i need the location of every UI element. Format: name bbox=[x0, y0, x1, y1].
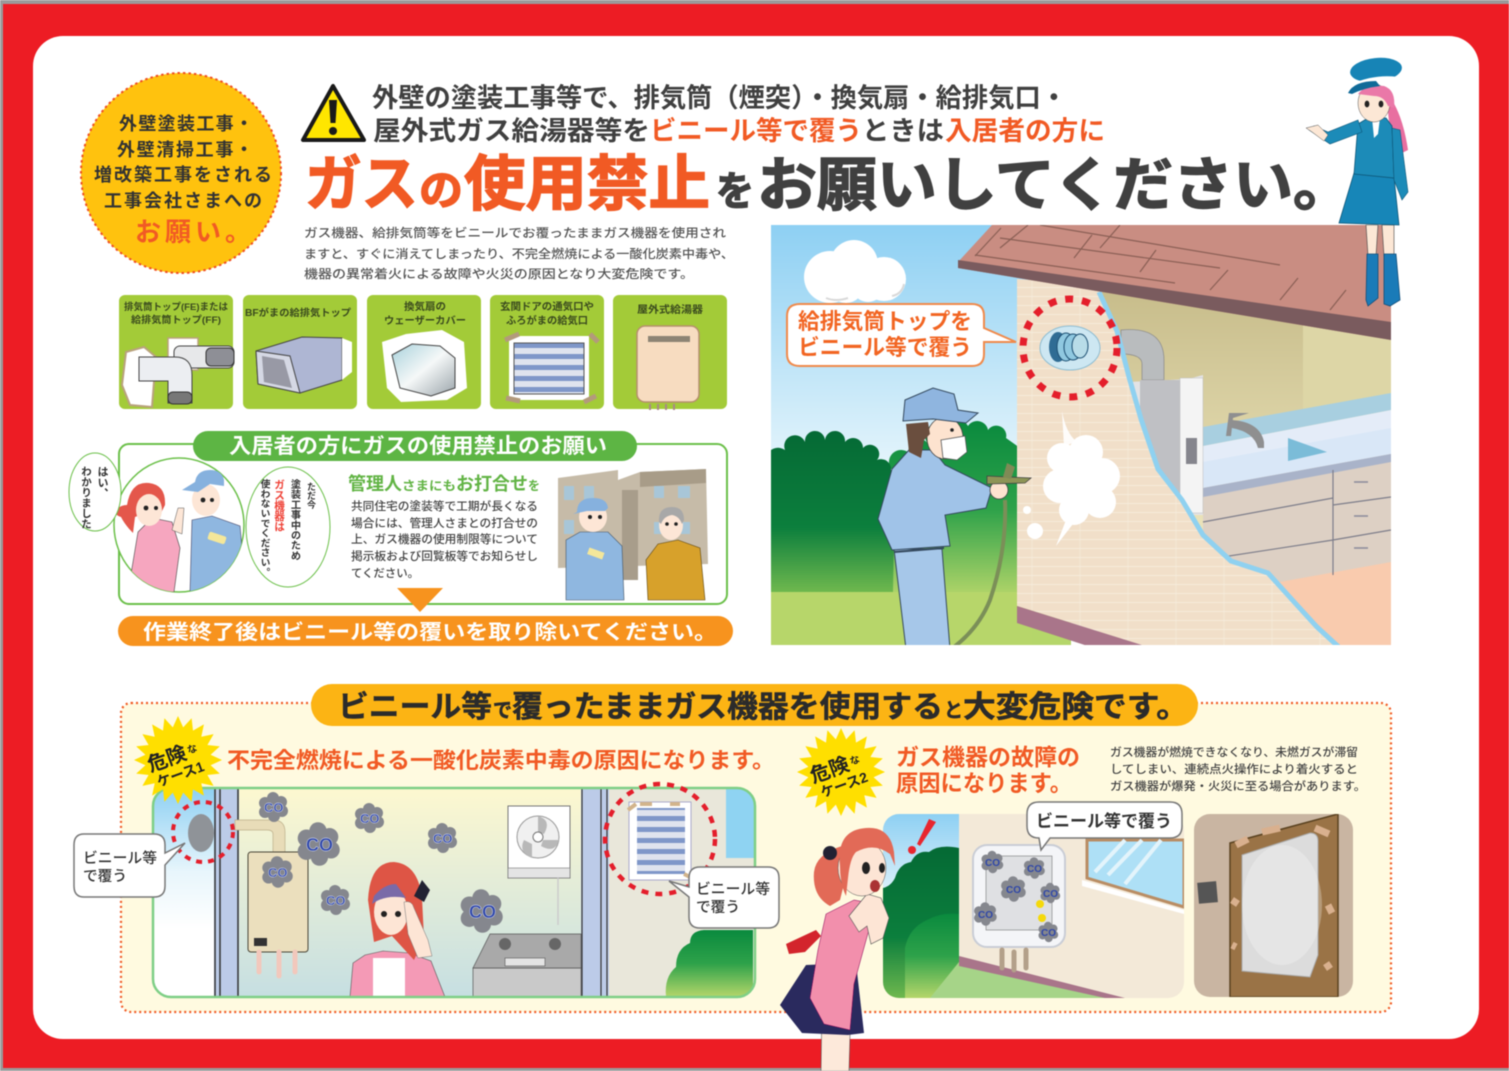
CO clouds: CO bbox=[306, 835, 333, 855]
spray foam bbox=[1023, 411, 1120, 546]
water heater and duct bbox=[235, 820, 308, 976]
wall with foundation and blue cutaway edge bbox=[1017, 279, 1342, 650]
arrow: down to final step bbox=[397, 588, 443, 612]
text block: case 2 explanation: ガス機器が燃焼できなくなり、未燃ガスが滞留 bbox=[1110, 745, 1358, 759]
heading: title lines: 外壁の塗装工事等で、排気筒（煙突）・換気扇・給排気口・ bbox=[372, 83, 1067, 113]
callout: left vent covered: ビニール等 bbox=[83, 849, 157, 867]
text block: consult the building manager: 上、ガス機器の使用制限等について bbox=[351, 532, 538, 546]
text block: intro explanation: ますと、すぐに消えてしまったり、不完全燃焼による一酸化炭素中毒や、 bbox=[304, 246, 734, 261]
callout: covered heater: ビニール等で覆う bbox=[1036, 811, 1172, 831]
card: weather cover bbox=[367, 295, 481, 409]
heading: title lines: ガス bbox=[305, 151, 418, 218]
heading: case 1: 不完全燃焼による一酸化炭素中毒の原因になります。 bbox=[227, 748, 775, 773]
window bbox=[1082, 840, 1184, 914]
covered water heater with CO: CO bbox=[978, 910, 993, 921]
text block: consult the building manager: を bbox=[528, 479, 540, 493]
gas stove bbox=[473, 934, 581, 1000]
text block: consult the building manager: さまにも bbox=[402, 479, 456, 493]
heading: case 2 bbox=[896, 744, 1080, 796]
heading pill: 大変危険です。 bbox=[963, 691, 1189, 724]
banner: remove the covering afterwards bbox=[118, 616, 733, 646]
badge: danger case 2: 危険 bbox=[807, 752, 852, 788]
wall fan bbox=[508, 806, 570, 925]
badge: request to contractors: 工事会社さまへの bbox=[104, 191, 262, 211]
panel: danger section bbox=[74, 684, 1391, 1071]
heading: case 2: ガス機器の故障の bbox=[896, 744, 1080, 770]
badge: danger case 2 bbox=[797, 728, 885, 816]
badge: danger case 1 bbox=[134, 716, 222, 804]
CO clouds: CO bbox=[326, 893, 346, 908]
covered water heater with CO: CO bbox=[1041, 928, 1056, 939]
bubble: resident reply: はい、 bbox=[96, 466, 108, 499]
icon: red exclamation mark bbox=[908, 819, 936, 854]
callout: right vent covered: ビニール等 bbox=[696, 880, 770, 898]
CO clouds: CO bbox=[264, 800, 284, 815]
illustration: resident and worker talking bbox=[114, 458, 246, 592]
CO clouds: CO bbox=[469, 902, 496, 922]
CO clouds: CO bbox=[268, 865, 288, 880]
text block: case 2 explanation: ガス機器が爆発・火災に至る場合があります。 bbox=[1110, 779, 1366, 793]
roof bbox=[958, 225, 1391, 340]
heading pill: ビニール等 bbox=[338, 691, 492, 724]
icon: warning triangle bbox=[303, 86, 364, 140]
scene: carbon monoxide indoors bbox=[153, 784, 755, 1000]
bubble: worker request: ガス機器は bbox=[273, 479, 285, 532]
card: weather cover: ウェーザーカバー bbox=[384, 315, 466, 327]
badge: request to contractors: 増改築工事をされる bbox=[94, 164, 272, 185]
card: door vent: 玄関ドアの通気口や bbox=[500, 300, 594, 313]
heading: title lines: 入居者の方に bbox=[945, 116, 1105, 146]
CO clouds: CO bbox=[360, 811, 380, 826]
right wall vent bbox=[628, 802, 692, 880]
illustration: apartment building, worker and manager bbox=[558, 469, 708, 600]
character: guide woman in blue uniform bbox=[1306, 55, 1408, 306]
card: exhaust top: 給排気筒トップ(FF) bbox=[131, 314, 221, 326]
text block: case 2 explanation bbox=[1110, 745, 1366, 793]
covered water heater with CO: CO bbox=[985, 858, 1000, 869]
card: weather cover: 換気扇の bbox=[404, 300, 446, 313]
panel: ask residents not to use gas bbox=[69, 431, 727, 604]
text block: intro explanation: 機器の異常着火による故障や火災の原因となり大変危険です。 bbox=[304, 266, 694, 281]
heading pill: 覆ったままガス機器を使用する bbox=[512, 691, 943, 724]
heading: title lines: を bbox=[716, 170, 754, 214]
pill heading: 入居者の方にガスの使用禁止のお願い bbox=[229, 435, 607, 458]
heading pill bbox=[311, 684, 1198, 726]
badge: danger case 1: な bbox=[186, 742, 199, 757]
illustration: worker covering a wall vent bbox=[766, 225, 1391, 650]
text block: consult the building manager: お打合せ bbox=[456, 474, 528, 494]
heading: title lines: 屋外式ガス給湯器等を bbox=[373, 116, 650, 146]
text block: consult the building manager: 管理人 bbox=[348, 473, 402, 494]
banner: remove the covering afterwards: 作業終了後はビニール等の覆いを取り除いてください。 bbox=[143, 621, 717, 644]
text block: consult the building manager bbox=[348, 473, 540, 580]
card: door vent: ふろがまの給気口 bbox=[506, 314, 588, 327]
badge: danger case 1: 危険 bbox=[144, 741, 190, 777]
covered water heater with CO: CO bbox=[1006, 885, 1021, 896]
text block: case 2 explanation: してしまい、連続点火操作により着火すると bbox=[1110, 762, 1358, 776]
CO clouds bbox=[259, 792, 503, 933]
card: exhaust top: 排気筒トップ(FE)または bbox=[124, 301, 228, 313]
card: BF vent top bbox=[243, 295, 357, 409]
bubble: resident reply bbox=[69, 453, 121, 531]
card: BF vent top: BFがまの給排気トップ bbox=[245, 306, 351, 319]
covered water heater with CO: CO bbox=[1043, 889, 1058, 900]
heading pill: で bbox=[493, 700, 512, 722]
bubble: worker request: 使わないでください。 bbox=[258, 478, 270, 577]
callout: covered heater bbox=[1027, 802, 1182, 850]
heading pill: と bbox=[944, 700, 963, 722]
bubble: worker request bbox=[246, 467, 330, 587]
callout: left vent covered: で覆う bbox=[83, 868, 127, 885]
badge: request to contractors: 外壁清掃工事・ bbox=[117, 140, 253, 160]
heading: title lines: ときは bbox=[862, 116, 944, 146]
scene: covered heater on entry door bbox=[1194, 814, 1353, 997]
badge: danger case 2: ケース2 bbox=[818, 769, 870, 801]
text block: intro explanation: ガス機器、給排気筒等をビニールでお覆ったままガス機器を使用され bbox=[304, 225, 726, 240]
left wall vent bbox=[188, 814, 214, 852]
badge: danger case 1: ケース1 bbox=[155, 758, 206, 790]
heading: title lines bbox=[305, 83, 1353, 218]
heading: title lines: ビニール等で覆う bbox=[650, 116, 862, 146]
text block: intro explanation bbox=[304, 225, 734, 281]
card: outdoor water heater bbox=[613, 295, 727, 410]
covered water heater with CO: CO bbox=[1027, 864, 1042, 875]
heading: title lines: 使用禁止 bbox=[464, 151, 710, 218]
callout: left vent covered bbox=[74, 834, 185, 897]
heading: title lines: の bbox=[419, 167, 463, 214]
scene: covered heater on outside wall bbox=[883, 814, 1184, 998]
ground and bushes bbox=[766, 420, 1071, 650]
card: outdoor water heater: 屋外式給湯器 bbox=[637, 303, 703, 316]
text block: consult the building manager: 掲示板および回覧板等でお知らせし bbox=[351, 549, 538, 563]
badge: request to contractors: お願い。 bbox=[135, 217, 251, 247]
bubble: worker request: ただ今 bbox=[306, 482, 316, 510]
badge: request to contractors bbox=[81, 73, 281, 273]
highlight right vent bbox=[605, 784, 715, 894]
bubble: worker request: 塗装工事中のため bbox=[288, 478, 301, 561]
badge: request to contractors: 外壁塗装工事・ bbox=[119, 114, 253, 134]
text block: consult the building manager: 共同住宅の塗装等で工期が長くなる bbox=[351, 499, 538, 513]
callout: cover the vent top: ビニール等で覆う bbox=[798, 335, 972, 360]
card: exhaust top bbox=[119, 295, 234, 409]
callout: right vent covered bbox=[669, 867, 779, 928]
pill heading bbox=[193, 431, 637, 461]
interior behind the cutaway bbox=[1099, 285, 1391, 650]
highlight left vent bbox=[173, 802, 233, 862]
text block: consult the building manager: てください。 bbox=[351, 567, 419, 580]
CO clouds: CO bbox=[433, 831, 452, 846]
heading: title lines: お願いしてください。 bbox=[757, 153, 1353, 218]
callout: cover the vent top bbox=[787, 304, 1016, 366]
vent with red dashed highlight bbox=[1023, 299, 1117, 397]
cloud bbox=[804, 240, 906, 303]
covered water heater with CO bbox=[973, 845, 1065, 970]
heading: case 2: 原因になります。 bbox=[896, 770, 1072, 796]
badge: danger case 2: な bbox=[848, 753, 862, 768]
character: surprised woman bbox=[780, 828, 895, 1071]
worker with spray gun bbox=[878, 388, 1031, 650]
bubble: resident reply: わかりました bbox=[80, 466, 92, 529]
panel: covered appliance cards bbox=[119, 295, 727, 410]
card: door vent bbox=[490, 295, 604, 409]
callout: right vent covered: で覆う bbox=[696, 899, 740, 916]
callout: cover the vent top: 給排気筒トップを bbox=[798, 309, 972, 334]
worried woman bbox=[350, 862, 445, 1000]
text block: consult the building manager: 場合には、管理人さまとの打合せの bbox=[351, 516, 538, 530]
